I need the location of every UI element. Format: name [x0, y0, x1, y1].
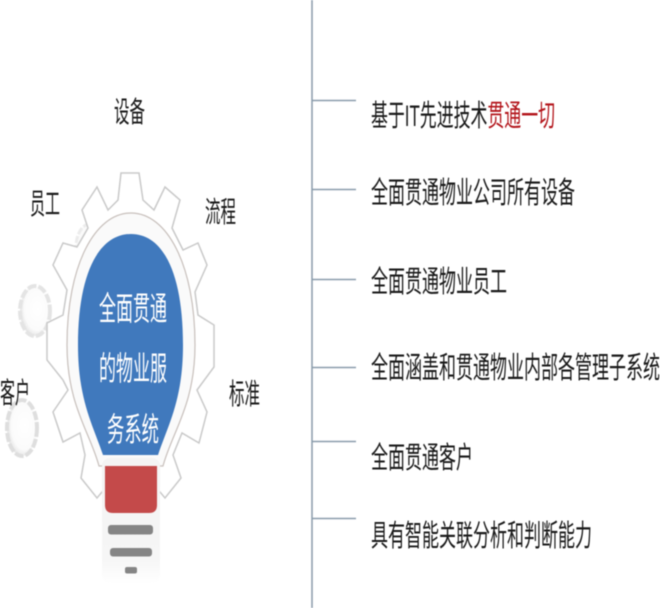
gear labels — [0, 96, 260, 411]
item 5: 全面贯通客户 — [371, 442, 473, 475]
red socket — [105, 466, 157, 513]
bulb base backing — [102, 458, 160, 583]
bulb title: 全面贯通 — [99, 290, 167, 327]
bulb title — [99, 290, 167, 448]
item 3: 全面贯通物业员工 — [371, 266, 507, 299]
bulb title: 务系统 — [107, 411, 159, 448]
small gears — [7, 224, 104, 456]
light bulb — [67, 213, 195, 583]
timeline axis with ticks — [312, 0, 356, 608]
gear labels: 标准 — [229, 378, 260, 411]
bulb title: 的物业服 — [99, 350, 167, 387]
blue bulb body — [78, 234, 183, 455]
large gear outline — [47, 173, 214, 498]
gear labels: 客户 — [0, 377, 30, 410]
gear labels: 设备 — [114, 96, 145, 129]
gear labels: 流程 — [205, 196, 236, 229]
item 1: 基于IT先进技术贯通一切 — [371, 100, 555, 133]
gear labels: 员工 — [30, 189, 60, 221]
grey bars — [108, 525, 153, 574]
bulb outer ring — [67, 213, 195, 466]
feature list — [371, 100, 660, 553]
